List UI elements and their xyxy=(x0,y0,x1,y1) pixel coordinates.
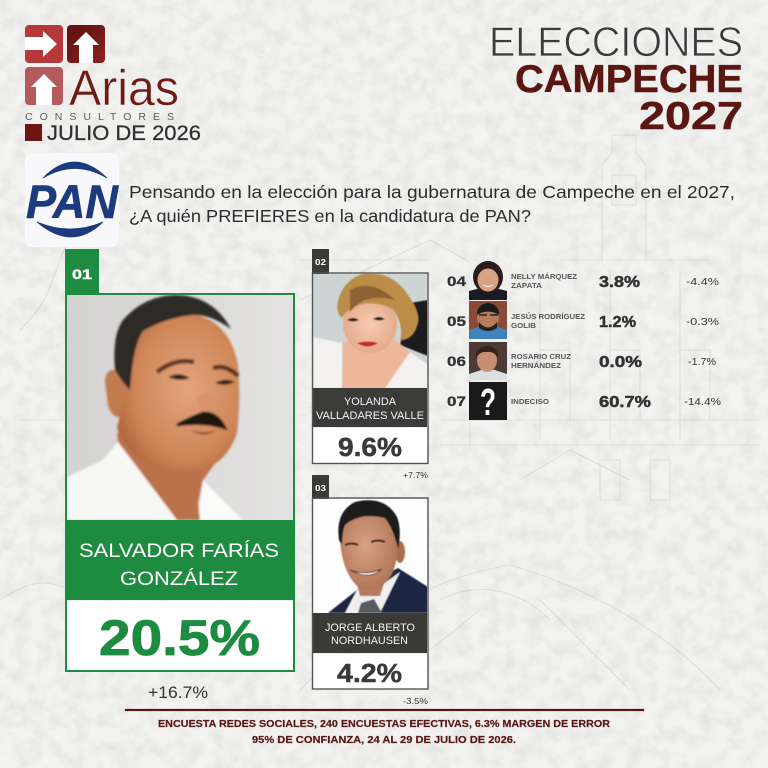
logo subtitle: CONSULTORES xyxy=(25,111,174,123)
row 06: Rosario Cruz Hernández: -1.7% xyxy=(688,356,716,368)
PAN party logo xyxy=(25,153,119,247)
rank tab 02 xyxy=(312,249,329,274)
percentage 9.6%: 9.6% xyxy=(338,432,402,462)
name bar xyxy=(313,388,427,427)
row 05: Jesús Rodríguez Golib xyxy=(447,301,719,339)
panel: candidate 02 Yolanda Valladares Valle xyxy=(312,249,428,480)
icon: right arrow tile xyxy=(25,25,63,63)
row 05: Jesús Rodríguez Golib: -0.3% xyxy=(686,316,719,328)
percentage 20.5%: 20.5% xyxy=(99,610,260,666)
icon: up arrow tile xyxy=(67,25,105,63)
name bar: VALLADARES VALLE xyxy=(316,410,424,422)
rank tab 03: 03 xyxy=(315,484,327,493)
portrait: Nelly Márquez xyxy=(469,261,507,300)
portrait: Rosario Cruz xyxy=(469,342,507,380)
row 04: Nelly Márquez Zapata: 04 xyxy=(447,273,466,289)
icon: up arrow tile light xyxy=(25,67,63,105)
footer methodology note: ENCUESTA REDES SOCIALES, 240 ENCUESTAS EFECTIVAS, 6.3% MARGEN DE ERROR xyxy=(158,718,610,730)
rank tab 03 xyxy=(312,475,329,499)
row 05: Jesús Rodríguez Golib: GOLIB xyxy=(511,321,536,330)
name bar xyxy=(313,613,427,653)
change -3.5%: -3.5% xyxy=(403,696,428,706)
change +7.7%: +7.7% xyxy=(403,470,428,480)
percentage 4.2%: 4.2% xyxy=(337,658,402,688)
row 07: Indeciso: 07 xyxy=(447,393,466,409)
row 06: Rosario Cruz Hernández: ROSARIO CRUZ xyxy=(511,352,572,361)
name bar: NORDHAUSEN xyxy=(331,635,408,647)
question xyxy=(129,182,735,226)
percentage 4.2% xyxy=(313,654,427,689)
rank tab 02: 02 xyxy=(315,258,327,267)
portrait: Jesús Rodríguez xyxy=(469,301,507,339)
name bar: GONZÁLEZ xyxy=(120,569,238,590)
rank tab 01: 01 xyxy=(72,266,92,282)
title: ELECCIONES xyxy=(489,18,743,65)
title: 2027 xyxy=(639,95,743,138)
row 06: Rosario Cruz Hernández xyxy=(447,342,716,380)
portrait: Jorge Alberto xyxy=(313,499,428,613)
row 06: Rosario Cruz Hernández: HERNÁNDEZ xyxy=(511,361,562,370)
row 04: Nelly Márquez Zapata: NELLY MÁRQUEZ xyxy=(511,272,578,281)
row 05: Jesús Rodríguez Golib: 05 xyxy=(447,313,466,329)
logo: Arias Consultores xyxy=(25,25,179,123)
change +16.7%: +16.7% xyxy=(148,684,208,702)
icon: question mark xyxy=(469,382,507,424)
icon: question mark: ? xyxy=(480,382,496,424)
PAN party logo: PAN xyxy=(26,175,119,228)
row 04: Nelly Márquez Zapata: -4.4% xyxy=(686,276,719,288)
row 05: Jesús Rodríguez Golib: JESÚS RODRÍGUEZ xyxy=(511,312,586,321)
row 06: Rosario Cruz Hernández: 0.0% xyxy=(599,354,642,371)
name bar: JORGE ALBERTO xyxy=(325,622,415,634)
title xyxy=(489,18,743,138)
name bar: YOLANDA xyxy=(344,396,397,408)
portrait: Yolanda Valladares xyxy=(313,273,428,388)
title: CAMPECHE xyxy=(515,58,743,101)
rank tab 01 xyxy=(65,249,99,294)
portrait: Salvador Farías xyxy=(67,295,293,520)
row 07: Indeciso xyxy=(447,382,721,424)
row 04: Nelly Márquez Zapata: 3.8% xyxy=(599,274,640,291)
footer methodology note: 95% DE CONFIANZA, 24 AL 29 DE JULIO DE 2026. xyxy=(252,734,516,746)
question: Pensando en la elección para la gubernatura de Campeche en el 2027, xyxy=(129,182,735,202)
row 04: Nelly Márquez Zapata xyxy=(447,261,719,300)
row 06: Rosario Cruz Hernández: 06 xyxy=(447,353,466,369)
panel: candidate 03 Jorge Alberto Nordhausen xyxy=(312,475,428,706)
date: JULIO DE 2026 xyxy=(47,122,201,145)
name bar: SALVADOR FARÍAS xyxy=(79,541,279,562)
row 07: Indeciso: -14.4% xyxy=(684,396,721,408)
row 05: Jesús Rodríguez Golib: 1.2% xyxy=(599,314,636,331)
percentage 20.5% xyxy=(67,601,293,670)
name bar xyxy=(67,520,293,600)
row 07: Indeciso: INDECISO xyxy=(511,397,549,406)
percentage 9.6% xyxy=(313,428,427,463)
question: ¿A quién PREFIERES en la candidatura de PAN? xyxy=(129,206,531,226)
footer methodology note xyxy=(125,709,644,746)
panel: candidate 01 Salvador Farías González xyxy=(65,249,294,702)
row 07: Indeciso: 60.7% xyxy=(599,394,651,411)
row 04: Nelly Márquez Zapata: ZAPATA xyxy=(511,281,543,290)
logo wordmark: Arias xyxy=(69,60,179,116)
